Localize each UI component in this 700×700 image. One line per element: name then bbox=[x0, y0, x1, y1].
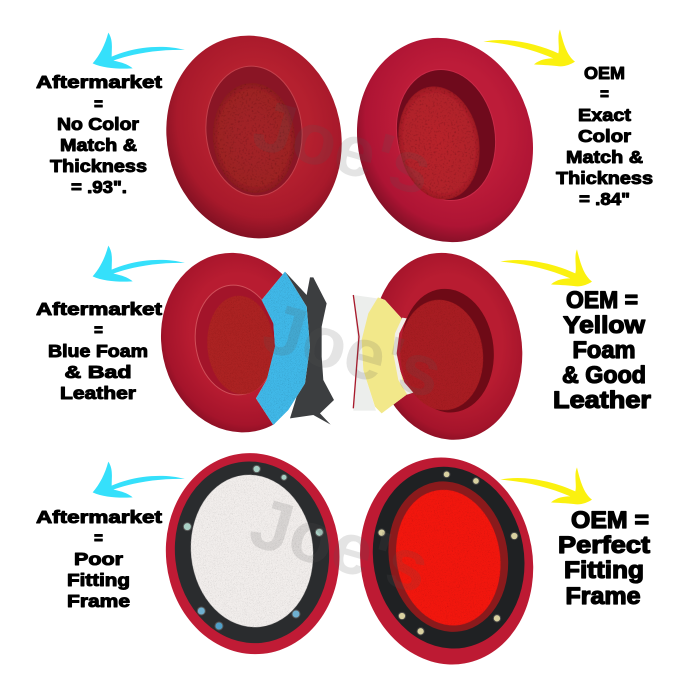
watermark: top: Joe's bbox=[245, 84, 441, 211]
watermark: middle: Joe's bbox=[255, 287, 451, 414]
arrow: yellow middle bbox=[500, 249, 592, 286]
text: OEM color and thickness: Color bbox=[578, 126, 631, 146]
text: OEM color and thickness: = .84" bbox=[579, 189, 630, 209]
text: aftermarket frame: Poor bbox=[74, 549, 123, 569]
text: OEM foam: Foam bbox=[572, 337, 636, 364]
text: OEM frame: Frame bbox=[566, 583, 640, 610]
pad: aftermarket front bbox=[148, 19, 360, 255]
white foam strip bbox=[393, 318, 413, 395]
text: aftermarket foam: = bbox=[94, 320, 103, 340]
text: aftermarket foam bbox=[36, 299, 162, 403]
text: aftermarket color and thickness: Thickness bbox=[50, 156, 147, 176]
yellow foam bbox=[362, 297, 408, 413]
text: OEM frame bbox=[558, 507, 650, 610]
text: aftermarket frame: = bbox=[94, 528, 103, 548]
frame pins bbox=[183, 465, 323, 630]
text: aftermarket foam: Blue Foam bbox=[48, 341, 148, 361]
blue foam bbox=[256, 272, 310, 425]
torn black leather bbox=[285, 272, 334, 425]
pad: OEM cut open with yellow foam bbox=[352, 252, 522, 440]
text: OEM color and thickness: = bbox=[600, 84, 609, 104]
arrow: yellow top bbox=[483, 29, 575, 66]
text: OEM frame: Perfect bbox=[558, 532, 650, 559]
text: aftermarket foam: Aftermarket bbox=[36, 299, 162, 319]
text: aftermarket color and thickness: = bbox=[94, 94, 103, 114]
text: OEM foam bbox=[553, 287, 651, 414]
text: OEM frame: Fitting bbox=[564, 557, 644, 584]
text: OEM foam: OEM = bbox=[566, 287, 638, 314]
text: aftermarket color and thickness: Match & bbox=[60, 135, 137, 155]
text: aftermarket frame: Fitting bbox=[67, 570, 130, 590]
text: aftermarket frame: Frame bbox=[67, 591, 130, 611]
text: OEM foam: Leather bbox=[553, 387, 651, 414]
text: OEM foam: Yellow bbox=[563, 312, 645, 339]
text: aftermarket color and thickness: = .93". bbox=[71, 177, 127, 197]
frame pins bbox=[378, 471, 518, 635]
text: OEM color and thickness: Match & bbox=[566, 147, 643, 167]
pad: OEM front bbox=[336, 19, 554, 261]
text: OEM color and thickness bbox=[556, 63, 653, 209]
text: aftermarket color and thickness bbox=[36, 72, 162, 197]
left pad leather bbox=[160, 252, 282, 432]
watermark: bottom: Joe's bbox=[242, 482, 438, 609]
right pad leather bbox=[380, 252, 522, 440]
pad: aftermarket cut open with blue foam bbox=[160, 252, 334, 432]
arrow: blue bottom bbox=[93, 462, 185, 498]
pad: aftermarket back with white foam bbox=[156, 444, 349, 663]
torn red seam bbox=[353, 295, 359, 408]
text: OEM foam: & Good bbox=[562, 362, 646, 389]
text: aftermarket foam: Leather bbox=[60, 383, 136, 403]
text: aftermarket foam: & Bad bbox=[64, 362, 132, 382]
text: OEM color and thickness: Thickness bbox=[556, 168, 653, 188]
text: OEM color and thickness: Exact bbox=[578, 105, 631, 125]
arrow: blue top bbox=[93, 33, 185, 69]
text: aftermarket color and thickness: Aftermarket bbox=[36, 72, 162, 92]
text: OEM frame: OEM = bbox=[571, 507, 649, 534]
text: OEM color and thickness: OEM bbox=[584, 63, 625, 83]
text: aftermarket color and thickness: No Color bbox=[57, 114, 139, 134]
text: aftermarket frame bbox=[36, 507, 162, 611]
text: aftermarket frame: Aftermarket bbox=[36, 507, 162, 527]
pad: OEM back with red foam bbox=[344, 444, 549, 678]
arrow: yellow bottom bbox=[500, 467, 592, 504]
torn white leather bbox=[353, 295, 377, 411]
arrow: blue middle bbox=[93, 246, 185, 282]
